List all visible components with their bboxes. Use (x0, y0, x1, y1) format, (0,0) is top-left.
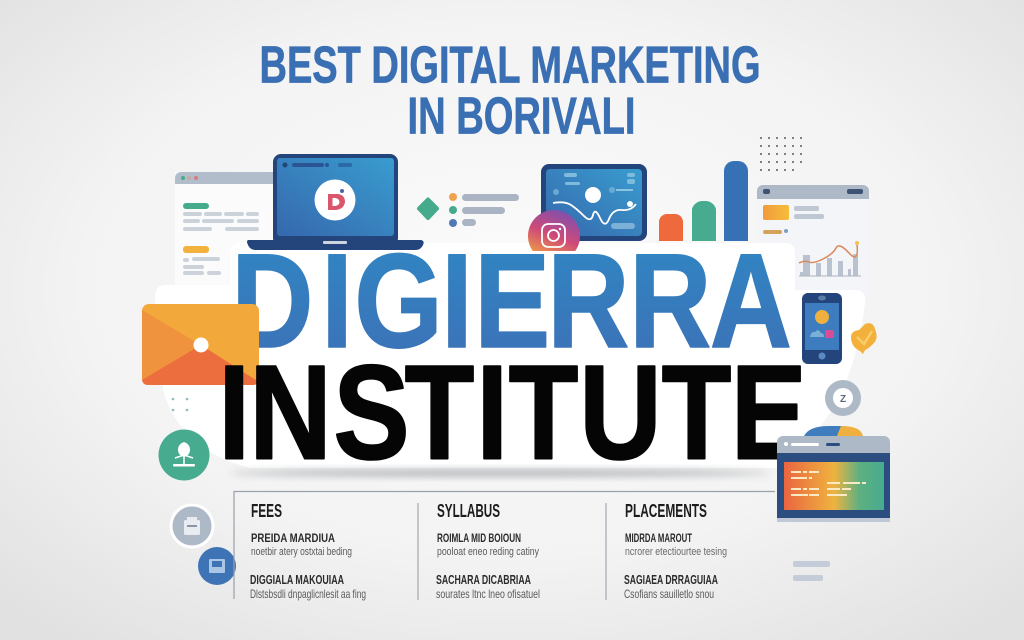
dots: small teal grid (172, 398, 188, 411)
icon: orange shield check (851, 323, 877, 354)
title (260, 36, 760, 146)
panel: details table (234, 492, 775, 601)
column: syllabus: SYLLABUS (437, 501, 500, 521)
column: syllabus (436, 501, 540, 601)
column: placements: SAGIAEA DRRAGUIAA (624, 572, 718, 587)
icon: smartphone (802, 293, 842, 364)
column: syllabus: ROIMLA MID BOIOUN (437, 533, 521, 545)
icon: grey circle document (171, 505, 213, 547)
icon: envelope (142, 304, 259, 385)
column: fees: DIGGIALA MAKOUIAA (250, 572, 344, 587)
panel: left browser window (175, 172, 285, 287)
panel: right browser window (757, 185, 869, 295)
icon: grey badge (825, 380, 861, 416)
column: syllabus: SACHARA DICABRIAA (436, 572, 531, 587)
brand name: DIGIERRA: DIGIERRA (231, 226, 792, 376)
column: syllabus: sourates ltnc lneo ofisatuel (436, 587, 540, 601)
dot grid (760, 137, 802, 171)
column: fees (250, 501, 366, 601)
icon: diamond and list (419, 193, 519, 227)
icon: green circle (158, 430, 210, 480)
brand name: INSTITUTE: INSTITUTE (218, 338, 807, 488)
column: fees: PREIDA MARDIUA (251, 533, 335, 545)
column: placements: PLACEMENTS (625, 501, 707, 521)
panel: terminal window (777, 426, 890, 522)
tablet with line chart (541, 164, 647, 241)
title: IN BORIVALI (408, 88, 636, 146)
panel: central white backdrop (155, 243, 865, 476)
bar chart (659, 161, 748, 241)
icon: blue circle calendar (198, 547, 236, 585)
column: fees: Dlstsbsdli dnpaglicnlesit aa fing (250, 587, 366, 601)
column: syllabus: pooloat eneo reding catiny (437, 546, 539, 558)
column: placements: ncrorer etectiourtee tesing (625, 546, 727, 558)
title: BEST DIGITAL MARKETING (260, 36, 760, 94)
small grey bars right (793, 561, 830, 581)
column: placements (624, 501, 727, 601)
icon: instagram (528, 210, 580, 251)
line chart in right window (799, 241, 861, 276)
icon: grey badge: Z (840, 394, 846, 405)
column: placements: Csofians sauilletlo snou (624, 587, 714, 601)
column: fees: FEES (251, 501, 282, 521)
laptop (247, 154, 424, 250)
column: fees: noetbir atery ostxtai beding (251, 546, 352, 558)
column: placements: MIDRDA MAROUT (625, 533, 692, 545)
